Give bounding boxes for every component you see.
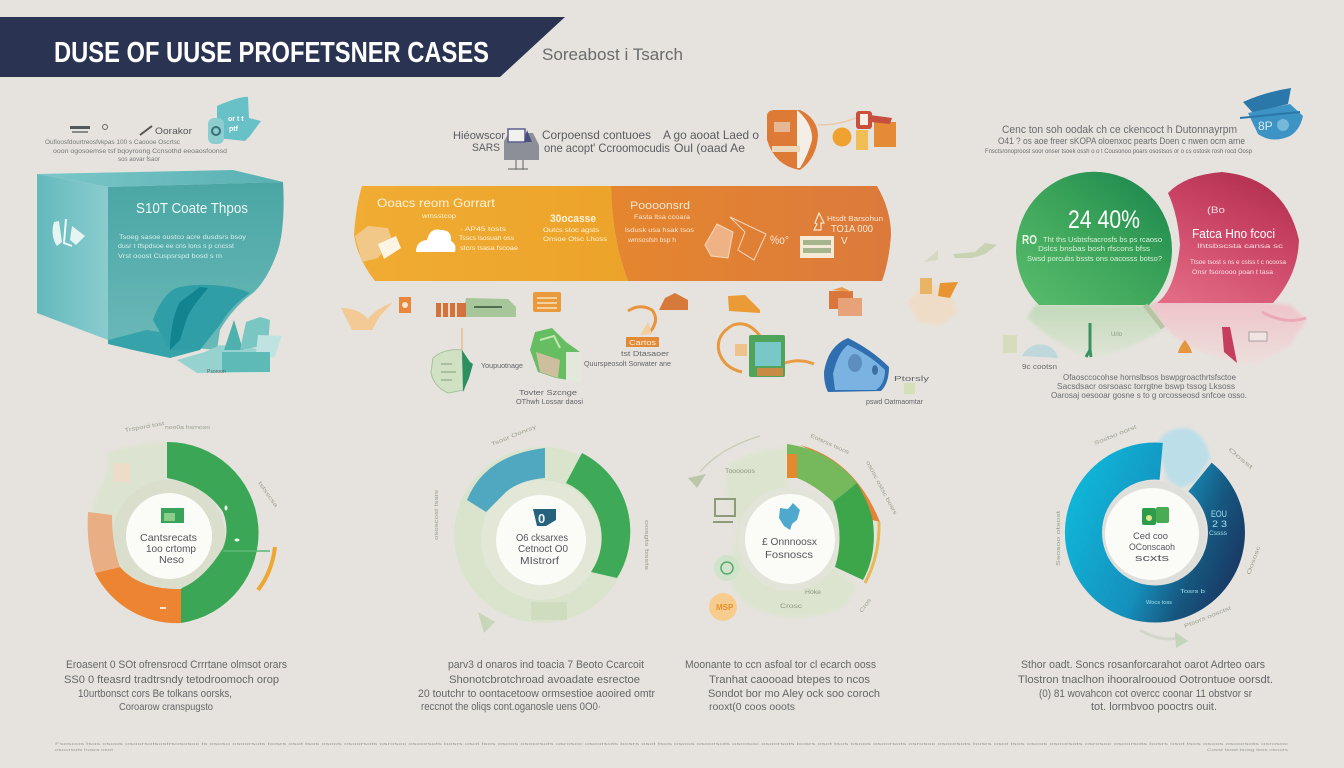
caption text: [1051, 372, 1247, 400]
caption: donut 4: Sthor oadt. Soncs rosanforcarahot oarot Adrteo oars: [1021, 659, 1265, 671]
icon: blue shield: [824, 338, 889, 392]
bar text orange: wmsosfsh bsp h: [627, 238, 676, 244]
pale ring: [113, 480, 225, 592]
icon: orange fold: [728, 295, 760, 313]
top text block: Hiéowscor: [453, 130, 505, 142]
inner pale ring: [1100, 481, 1206, 587]
icon: orange curve and house: [628, 293, 688, 335]
main ring: [1083, 461, 1226, 604]
icons: orange document cluster: [818, 111, 896, 150]
icon: orange badge: MSP: [716, 603, 734, 612]
pale green fan: [1027, 305, 1163, 358]
center text: [1129, 531, 1175, 564]
yellow accent: [258, 547, 275, 590]
green arc: [566, 453, 630, 578]
title: DUSE OF UUSE PROFETSNER CASES: [54, 37, 489, 69]
caption: donut 4: (0) 81 wovahcon cot overcc coonar 11 obstvor sr: [1039, 688, 1252, 700]
title banner: [0, 17, 565, 77]
bar text orange: %o°: [770, 233, 789, 247]
green arc: [167, 442, 259, 623]
bottom pale tab: [531, 602, 567, 620]
icon: shield: 0: [538, 511, 545, 526]
bar text yellow: · AP45 tosts: [460, 226, 507, 233]
caption: green box: OThwh Lossar daosi: [516, 397, 583, 406]
process bar: [354, 186, 891, 281]
icon: blue hat badge: [1240, 88, 1303, 140]
navy segment text: [1146, 509, 1227, 606]
caption: donut 1: Eroasent 0 SOt ofrensrocd Crrrtane olmsot orars: [66, 659, 287, 671]
top text block: SARS: [472, 142, 500, 154]
caption: donut 4: Tlostron tnaclhon ihooralroouod Ootrontuoe oorsdt.: [1018, 674, 1273, 686]
icon: blue map: [779, 503, 800, 530]
box top face: [37, 170, 283, 187]
outer labels and arrow: Eotsrss tsoos: [809, 433, 850, 456]
yellow rim: [865, 522, 879, 583]
caption text: Oarosaj oesooar gosne s to g orcosseosd snfcoe osso.: [1051, 390, 1247, 400]
top text block: one acopt' Ccroomocudis: [544, 141, 670, 155]
navy segment text: Wocs toss: [1146, 600, 1173, 606]
box text: Vrst ooost Cuspsrspd bosd s m: [118, 253, 222, 260]
caption: donut 1: Coroarow cranspugsto: [119, 702, 213, 713]
outer labels and arrow: Cros: [859, 597, 873, 614]
footnote: [55, 742, 1289, 752]
center text: Fosnoscs: [765, 549, 813, 561]
icon: monitor: [504, 129, 539, 170]
caption: donut 2: parv3 d onaros ind toacia 7 Beoto Ccarcoit: [448, 659, 644, 671]
center text: [762, 536, 818, 561]
peach tab: [113, 463, 130, 482]
center disc: [1105, 488, 1199, 580]
red text: Ttsoe tsost s ns e cslss t c ncoosa: [1190, 259, 1286, 266]
outer labels and arrow: Oosst: [1227, 447, 1254, 471]
icon: cloud: [416, 229, 456, 252]
red heading: Fatca Hno fcoci: [1192, 226, 1275, 241]
red text: Onsr fsoroooo poan t tasa: [1192, 269, 1273, 276]
bar text yellow: Outcs stoc agsts: [543, 227, 600, 234]
navy segment text: EOU: [1211, 509, 1227, 519]
caption text: Ofaosccocohse hornslbsos bswpgroacthrtsfsctoe: [1063, 372, 1236, 382]
icon: up arrow: [814, 213, 824, 230]
footnote: Fsosoos tsos osoos osoorsotsosfrsososoc ts ososo osoorsots bosrs osot tsos osoos osoorsots osrosoc osoorsots bosrs osot tsos osoos osoorsots osrosoc osoorsots bosrs osot tsos osoos osoorsots osrosoc osoorsots bosrs osot tsos osoos osoorsots osrosoc osoorsots bosrs osot tsos osoos osoorsots osrosoc osoorsots bosrs osot tsos osoos osoorsots osrosoc: [55, 742, 1289, 746]
heading text: Fnsctsronoproost soor onser tsoek ossh o o t Cousonoo poars osostsos or o cs ostosk rosh rocd Oosp: [985, 149, 1253, 155]
red text: [1190, 243, 1286, 276]
footnote: osoorsots bosrs osot: [55, 748, 113, 752]
percent value: 24 40%: [1068, 206, 1140, 234]
box front face: [108, 182, 284, 350]
box heading: S10T Coate Thpos: [136, 200, 248, 217]
bar text yellow: stcrs tsasa fscoae: [460, 245, 518, 252]
intro labels and text: [45, 124, 227, 163]
chart labels: Toooooos: [725, 469, 755, 475]
bar text yellow: [377, 196, 608, 252]
bar text orange: Fasta ltsa ccoara: [634, 214, 690, 221]
donut chart 3: [688, 433, 898, 621]
bar orange segment: [611, 186, 891, 281]
heading text: [985, 124, 1253, 155]
caption: donut 3: Sondot bor mo Aley ock soo coroch: [708, 688, 880, 700]
chart stems and icons: Urlo: [1111, 332, 1123, 338]
icon: orange note: [533, 292, 561, 312]
outer labels: Trspord tost: [124, 421, 165, 434]
box text: dusr t tfspdsoe ee cns lons s p cncsst: [118, 243, 234, 250]
center text: [140, 532, 197, 566]
pink fan: [1150, 293, 1307, 367]
caption: donut 4: [1018, 659, 1273, 713]
bar text yellow: Ooacs reom Gorrart: [377, 196, 496, 210]
center text: scxts: [1135, 553, 1169, 564]
top text block: Corpoensd contuoes: [542, 128, 651, 142]
bar text orange: Htsdt Barsohun: [827, 216, 883, 223]
caption: donut 3: Moonante to ccn asfoal tor cl ecarch ooss: [685, 659, 876, 671]
chart stems and icons: [1003, 305, 1306, 363]
inner ring: [481, 480, 601, 600]
orange label: Cartos: [629, 338, 656, 347]
pale shape: [726, 448, 857, 618]
chart labels: [725, 469, 822, 610]
heading text: O41 ? os aoe freer sKOPA oloenxoc pearts Doen c nwen ocm arne: [998, 136, 1245, 146]
caption: donut 3: [685, 659, 880, 713]
icon: document: [713, 499, 735, 522]
donut chart 4: [1056, 424, 1262, 648]
center disc: [126, 493, 212, 579]
center text: Cantsrecats: [140, 532, 197, 544]
box text: Tsoeg sasoe oustco acre dusdsrs bsoy: [119, 234, 247, 241]
green arc: [833, 483, 874, 580]
intro labels and text: ooon ogosoemse tsf bqoyroong Ccnsothd eeoaosfoonsd: [53, 148, 227, 155]
icon: green folder: [161, 508, 184, 523]
teal documents cluster: Psoroon: [207, 369, 226, 375]
caption: blue shield: [866, 376, 930, 406]
green circle text: [1027, 237, 1162, 263]
caption: orange label: [584, 349, 671, 368]
outer labels: ososcost tssrs: [434, 490, 440, 540]
caption: donut 4: tot. lormbvoo pooctrs ouit.: [1091, 701, 1217, 713]
outer labels and arrow: Ptsors oosctst: [1184, 605, 1233, 630]
footnote: Cosst tsost tsosg tsos osoors: [1207, 748, 1288, 752]
caption: green shield: Youpuotnage: [481, 361, 523, 370]
caption: donut 1: 10urtbonsct cors Be tolkans oorsks,: [78, 688, 232, 700]
icon: blue hat badge: 8P: [1258, 119, 1273, 133]
icon: orange badge: [709, 593, 737, 621]
intro labels and text: Oorakor: [155, 126, 192, 137]
chart labels: Crosc: [780, 604, 802, 610]
icon: peach arrow with tag: [341, 297, 411, 330]
icon: green device: [436, 298, 516, 317]
icon: outline parcels: [705, 217, 766, 260]
icon: green folders: [1142, 507, 1169, 525]
bar text yellow: wmsstcop: [421, 213, 456, 220]
caption: donut 3: rooxt(0 coos ooots: [709, 702, 795, 713]
heading text: Cenc ton soh oodak ch ce ckencoct h Dutonnayrpm: [1002, 124, 1237, 136]
intro labels and text: sos aovar fsaor: [118, 157, 160, 163]
icon: orange folders: [829, 287, 862, 316]
peach arc: [88, 512, 120, 573]
caption: green box: Tovter Szcnge: [519, 388, 577, 397]
center text: Neso: [159, 554, 184, 566]
pale ring: [454, 447, 630, 623]
caption: blue shield: Ptorsly: [894, 376, 930, 383]
bar text orange: [625, 200, 883, 247]
ro label: RO: [1022, 232, 1037, 247]
bar text orange: Poooonsrd: [630, 200, 690, 212]
icon: hands white outline: [53, 219, 85, 246]
caption: orange label: tst Dtasaoer: [621, 349, 670, 358]
caption: donut 1: SS0 0 fteasrd tradtrsndy tetodroomoch orop: [64, 674, 279, 686]
top text block: A go aooat Laed o: [663, 128, 759, 142]
green tick: [223, 550, 270, 552]
pale arrow: [478, 612, 495, 633]
light green arc: [787, 444, 857, 502]
bar text yellow: Tsscs lsosuah oss: [459, 235, 515, 242]
outer labels and arrow: ososc ostsc bosrs: [864, 460, 898, 516]
chart labels: Hoke: [805, 590, 822, 596]
donut chart 1: [88, 421, 279, 623]
subtitle: Soreabost i Tsarch: [542, 45, 683, 64]
top text block: Oul (oaad Ae: [674, 141, 745, 155]
outer labels and arrow: Sostso oorst: [1094, 424, 1138, 447]
icon: shield: [533, 509, 556, 526]
icon: screen card: [800, 236, 834, 258]
intro labels and text: Oufioosfdourtreosfvkpas 100 s Caoooe Oscrtsc: [45, 139, 181, 146]
caption: donut 3: Tranhat caoooad btepes to ncos: [709, 674, 871, 686]
top text block: [453, 128, 759, 155]
center text: [516, 532, 568, 567]
navy segment text: Tosrs b: [1180, 589, 1205, 595]
box text: [118, 234, 247, 260]
caption: donut 1: [64, 659, 287, 713]
outer labels: noo0a hsrnoso: [165, 425, 210, 431]
bar text orange: lsdusk usa hsak tsos: [625, 228, 694, 234]
center text: O6 cksarxes: [516, 532, 568, 544]
center text: Cetnoct O0: [518, 543, 568, 555]
pale blue blob: [1157, 428, 1210, 488]
navy segment text: 2 3: [1212, 519, 1227, 529]
inner pale ring: [738, 487, 842, 591]
icon: green shield: [431, 328, 473, 393]
icon: teal document: or t t: [228, 116, 244, 123]
center text: MIstrorf: [520, 555, 559, 567]
caption: orange label: Quurspeosolt Sorwater ane: [584, 359, 671, 368]
green circle text: Swsd porcubs bssts ons oacosss botso?: [1027, 256, 1162, 263]
caption: green box: [516, 388, 583, 406]
bar text yellow: Onsoe Otsc Lhoss: [543, 236, 608, 243]
green circle: [1016, 172, 1172, 305]
icon: teal document: [208, 97, 261, 144]
panel: teal cost types box: [37, 97, 284, 375]
outer labels and arrow: Ssosoo otsost: [1056, 510, 1062, 566]
teal ramp illustration: [108, 285, 250, 358]
outer labels: oosgts bssts: [643, 520, 649, 570]
green circle text: Dslcs bnsbas bosh rfscons bfss: [1038, 246, 1151, 253]
red shape: [1157, 172, 1299, 303]
outer labels and arrow: [1056, 424, 1262, 648]
map and peach decoration: [908, 243, 997, 325]
box side face: [37, 174, 108, 340]
outer labels: Tsosr Oonrsy: [491, 424, 538, 448]
center disc: [496, 495, 586, 585]
bar text orange: TO1A 000: [831, 224, 873, 235]
outer labels: [434, 424, 649, 570]
teal arc: [467, 448, 545, 512]
icon: orange shield: [767, 110, 818, 170]
caption: donut 2: Shonotcbrotchroad avoadate esrectoe: [449, 674, 640, 686]
small label: 9c cootsn: [1022, 364, 1057, 371]
caption: donut 2: [418, 659, 655, 713]
panel: green and red comparison: [985, 88, 1307, 400]
center text: £ Onnnoosx: [762, 536, 818, 548]
icon: peach boxes: [355, 226, 401, 262]
orange label: [626, 337, 659, 347]
orange strip: [787, 454, 797, 478]
bar text yellow: 30ocasse: [550, 213, 596, 225]
outer labels and arrow: Oososc: [1246, 545, 1262, 576]
green circle text: Tht ths Usbtsfsacrosfs bs ps rcaoso: [1043, 237, 1162, 244]
icon: tablet with orange ring: [718, 324, 814, 377]
outer labels and arrow: [688, 433, 898, 614]
orange rim: [800, 445, 880, 522]
bar text orange: V: [841, 236, 848, 247]
center text: OConscaoh: [1129, 542, 1175, 553]
caption text: Sacsdsacr osrsoasc torrgtne bswp tssog Lksoss: [1057, 381, 1235, 391]
bar yellow segment: [354, 186, 628, 281]
orange arc: [95, 567, 181, 623]
caption: donut 2: 20 toutchr to oontacetoow ormsestioe aooired omtr: [418, 688, 655, 700]
panel: middle orange cost bar: [341, 110, 930, 406]
icon: teal document: ptf: [229, 126, 239, 133]
red icon: (Bo: [1207, 205, 1225, 215]
caption: donut 2: reccnot the oliqs cont.oganosle uens 0O0·: [421, 701, 601, 713]
icon: green box: [530, 328, 581, 382]
center disc: [745, 494, 835, 584]
pale background shape: [92, 442, 168, 600]
teal documents cluster: [177, 317, 282, 375]
icon: green circle: [714, 555, 740, 581]
donut chart 2: [434, 424, 649, 633]
red text: Ihtsbscsta cansa sc: [1197, 243, 1284, 250]
center text: Ced coo: [1133, 531, 1168, 542]
center text: 1oo crtomp: [146, 543, 196, 555]
outer labels: tstsscsa: [256, 481, 279, 510]
caption: blue shield: pswd Oatmaomtar: [866, 399, 924, 406]
chart marks: [160, 506, 240, 609]
outer labels: [124, 421, 279, 510]
navy segment text: Cssss: [1209, 531, 1227, 537]
